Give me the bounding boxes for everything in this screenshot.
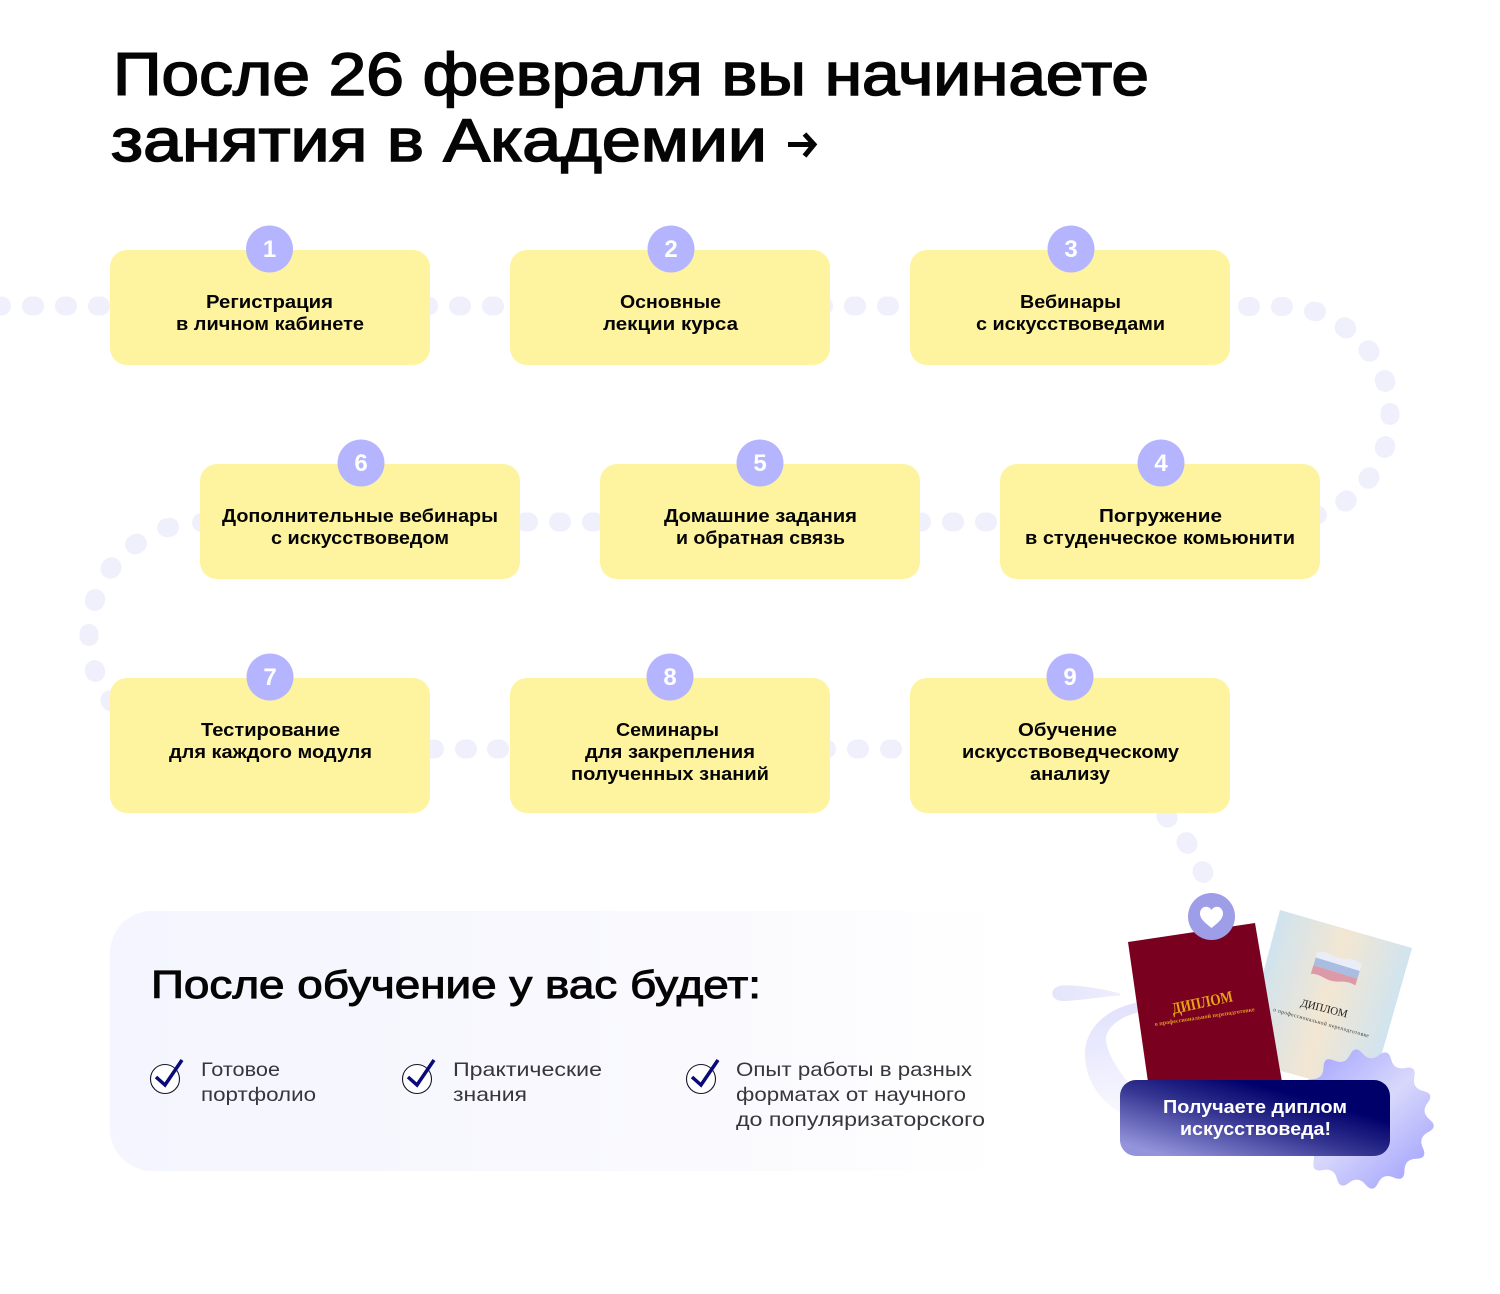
step 8: Семинары xyxy=(616,720,719,740)
step 7: для каждого модуля xyxy=(169,742,372,762)
title: После 26 февраля вы начинаете xyxy=(113,41,1149,108)
step 6 xyxy=(200,440,520,579)
outcome: experience: Опыт работы в разных xyxy=(736,1059,972,1081)
step 1: 1 xyxy=(263,236,276,263)
step 9: искусствоведческому xyxy=(962,742,1179,762)
step 9: 9 xyxy=(1063,664,1077,691)
step 1 xyxy=(110,226,430,365)
outcome: portfolio xyxy=(150,1059,316,1106)
step 2: лекции курса xyxy=(603,314,739,334)
step 4: в студенческое комьюнити xyxy=(1025,528,1295,548)
step 1: Регистрация xyxy=(206,292,333,312)
illustration: diplomas xyxy=(1052,893,1441,1194)
callout: diploma: искусствоведа! xyxy=(1180,1119,1331,1139)
step 8: 8 xyxy=(663,664,677,691)
outcome: portfolio: Готовое xyxy=(201,1059,280,1081)
step 4: Погружение xyxy=(1099,506,1222,526)
outcome: portfolio: портфолио xyxy=(201,1084,316,1106)
step 1: в личном кабинете xyxy=(176,314,364,334)
red diploma xyxy=(1128,923,1282,1082)
step 9 xyxy=(910,654,1230,813)
outcome: experience: до популяризаторского xyxy=(736,1109,985,1131)
panel heading: После обучение у вас будет: xyxy=(151,964,761,1007)
outcome: practical knowledge: знания xyxy=(453,1084,527,1106)
step 7: Тестирование xyxy=(201,720,340,740)
step 2: Основные xyxy=(620,292,721,312)
blue diploma xyxy=(1240,910,1412,1095)
step 5: и обратная связь xyxy=(676,528,845,548)
step 6: с искусствоведом xyxy=(271,528,449,548)
step 9: анализу xyxy=(1030,764,1110,784)
step 3: 3 xyxy=(1064,236,1078,263)
step 3: Вебинары xyxy=(1020,292,1121,312)
red diploma: ДИПЛОМ xyxy=(1170,988,1234,1018)
step 4: 4 xyxy=(1154,450,1168,477)
decorative swoosh xyxy=(1085,1002,1140,1120)
step 5 xyxy=(600,440,920,579)
step 5: 5 xyxy=(753,450,767,477)
step 4 xyxy=(1000,440,1320,579)
flag xyxy=(1311,949,1362,988)
seal xyxy=(1287,1044,1441,1194)
step 8: для закрепления xyxy=(585,742,755,762)
step 6: 6 xyxy=(354,450,368,477)
step 3 xyxy=(910,226,1230,365)
heart badge xyxy=(1188,893,1235,940)
step 3: с искусствоведами xyxy=(976,314,1165,334)
outcome: practical knowledge xyxy=(402,1059,602,1106)
step 2 xyxy=(510,226,830,365)
blue diploma: ДИПЛОМ xyxy=(1299,997,1349,1021)
outcome: practical knowledge: Практические xyxy=(453,1059,602,1081)
step 5: Домашние задания xyxy=(664,506,857,526)
dotted path connecting steps xyxy=(0,296,1400,886)
title: занятия в Академии xyxy=(111,107,767,174)
step 7: 7 xyxy=(263,664,277,691)
blue diploma: о профессиональной переподготовке xyxy=(1272,1006,1370,1040)
arrow: title xyxy=(788,134,814,156)
outcome: experience xyxy=(686,1059,985,1131)
title xyxy=(111,41,1149,174)
step 7 xyxy=(110,654,430,813)
step 9: Обучение xyxy=(1018,720,1117,740)
step 2: 2 xyxy=(664,236,678,263)
callout: diploma: Получаете диплом xyxy=(1163,1097,1347,1117)
outcome: experience: форматах от научного xyxy=(736,1084,966,1106)
decorative drop xyxy=(1052,985,1120,1001)
step 6: Дополнительные вебинары xyxy=(222,506,498,526)
red diploma: о профессиональной переподготовке xyxy=(1154,1006,1256,1028)
step 8: полученных знаний xyxy=(571,764,769,784)
step 8 xyxy=(510,654,830,813)
callout: diploma xyxy=(1120,1080,1390,1156)
panel: outcomes xyxy=(110,911,1010,1171)
